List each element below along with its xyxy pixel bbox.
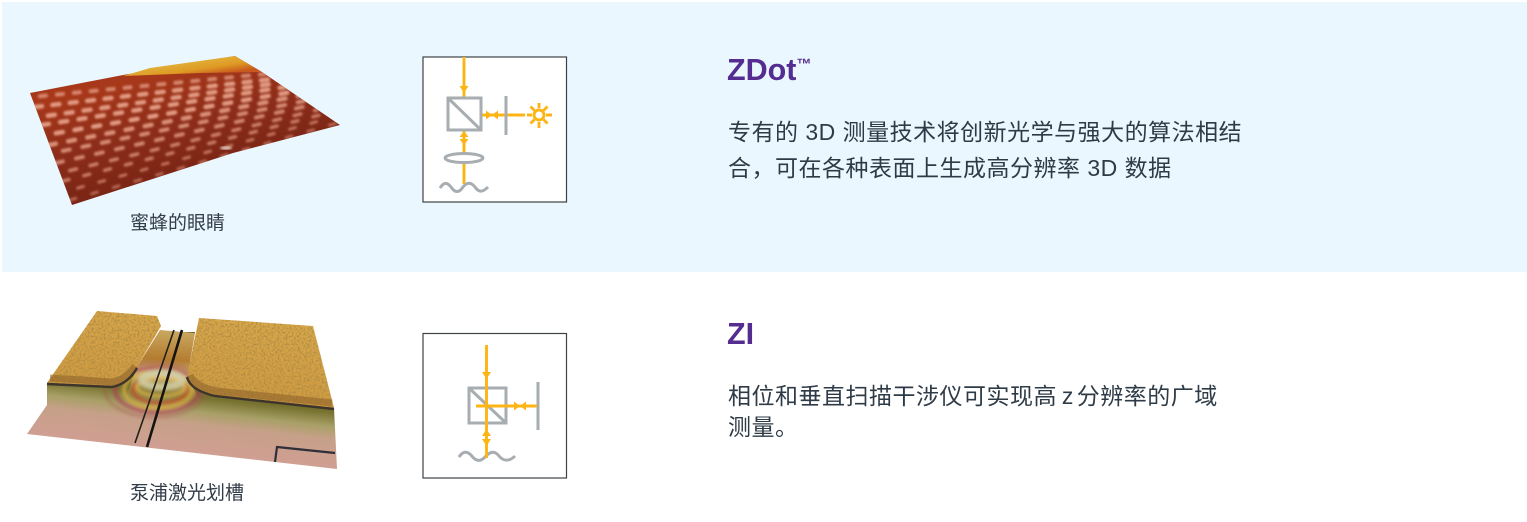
- heading: ZDot: ZDot™: [727, 53, 811, 87]
- text: ZI description: 测量。: [728, 414, 798, 440]
- heading: ZI: ZI: [727, 317, 754, 351]
- diagram: ZDot optical path: [422, 56, 568, 203]
- diagram: ZI optical path: [422, 332, 568, 479]
- image: bee eye 3D surface: [30, 56, 340, 205]
- caption: bee eye: 蜜蜂的眼睛: [130, 213, 225, 234]
- image: pump laser groove 3D surface: [27, 311, 337, 469]
- text: ZI description: [728, 383, 1218, 440]
- caption: pump laser groove: 泵浦激光划槽: [130, 483, 244, 504]
- panel: ZDot background: [2, 2, 1527, 272]
- text: ZI description: 相位和垂直扫描干涉仪可实现高 z 分辨率的广域: [728, 383, 1218, 409]
- text: ZDot description: 合，可在各种表面上生成高分辨率 3D 数据: [728, 154, 1172, 180]
- text: ZDot description: [728, 119, 1242, 180]
- text: ZDot description: 专有的 3D 测量技术将创新光学与强大的算法相结: [728, 119, 1242, 145]
